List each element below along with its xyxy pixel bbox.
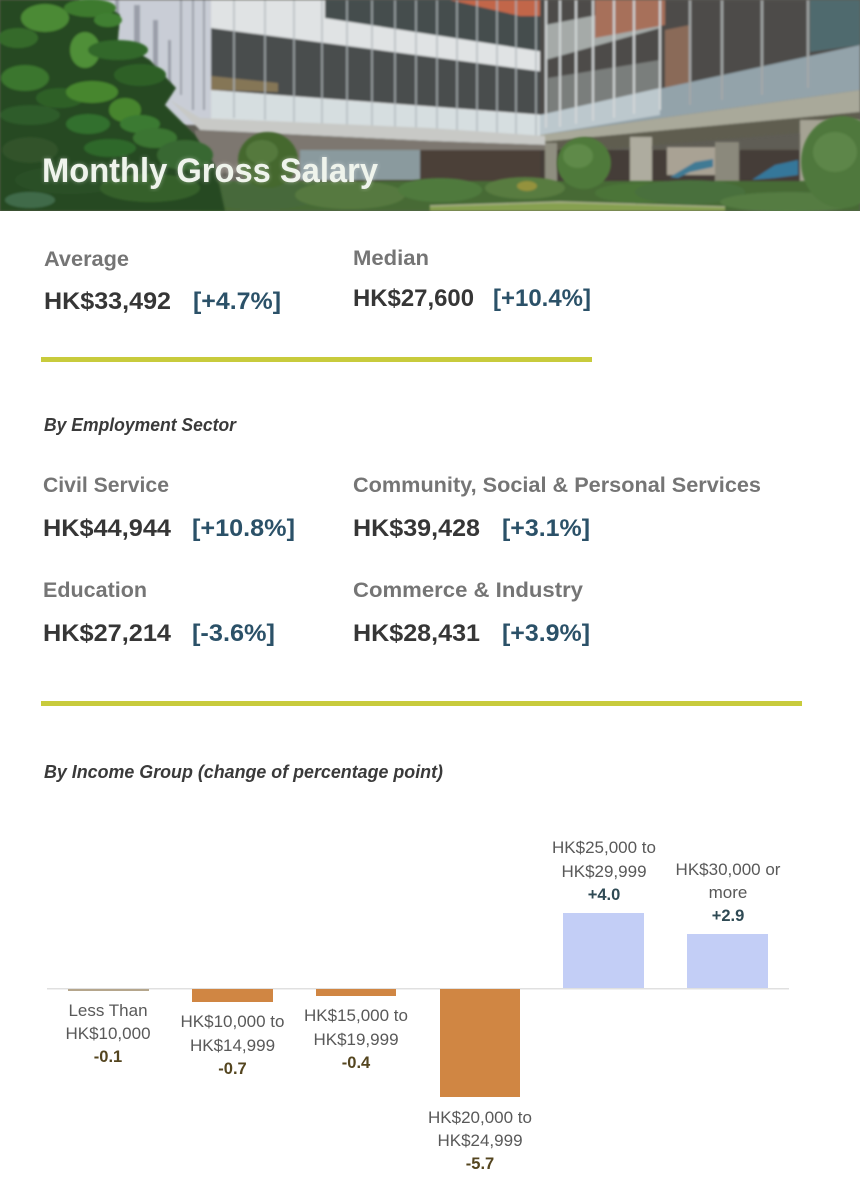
heading: by employment sector: By Employment Sector (44, 415, 237, 435)
stat: commerce and industry: Commerce & Industry (353, 579, 583, 602)
bar: less than HK$10,000: HK$10,000 (65, 1024, 151, 1043)
stat: education: [-3.6%] (192, 620, 275, 647)
bar: HK$30,000 or more: more (709, 883, 747, 902)
stat: community, social and personal services: [+3.1%] (502, 515, 590, 542)
stat: median salary: Median (353, 247, 429, 270)
stat: civil service (43, 474, 295, 542)
bar: HK$10,000 to HK$14,999: HK$14,999 (190, 1036, 275, 1055)
stat: commerce and industry: [+3.9%] (502, 620, 590, 647)
title: Monthly Gross Salary (42, 152, 378, 190)
bar: HK$15,000 to HK$19,999: -0.4 (342, 1054, 371, 1072)
bar: less than HK$10,000: Less Than (68, 1001, 148, 1020)
bar: HK$15,000 to HK$19,999: HK$19,999 (313, 1030, 399, 1049)
bar: HK$20,000 to HK$24,999: HK$24,999 (437, 1131, 523, 1150)
stat: average salary: [+4.7%] (193, 288, 281, 315)
stat: average salary (44, 248, 281, 315)
bar: HK$25,000 to HK$29,999: HK$25,000 to (552, 838, 656, 857)
title halo: Monthly Gross Salary (42, 152, 378, 190)
hero photo: courtyard building with trees (0, 0, 860, 212)
bar: HK$10,000 to HK$14,999: -0.7 (218, 1060, 247, 1078)
stat: education (43, 579, 275, 647)
bar: HK$20,000 to HK$24,999: HK$20,000 to (428, 1108, 532, 1127)
foliage: foreground tree (0, 0, 225, 211)
stat: average salary: HK$33,492 (44, 288, 171, 315)
heading: by income group: By Income Group (change of percentage point) (44, 762, 443, 782)
bar: HK$25,000 to HK$29,999: +4.0 (588, 886, 620, 904)
bar: HK$15,000 to HK$19,999 (304, 989, 408, 1072)
stat: median salary (353, 247, 591, 312)
stat: commerce and industry: HK$28,431 (353, 620, 480, 647)
bar: HK$20,000 to HK$24,999: -5.7 (466, 1155, 494, 1173)
bar: HK$10,000 to HK$14,999 (181, 989, 284, 1078)
bar: HK$10,000 to HK$14,999: HK$10,000 to (181, 1012, 284, 1031)
bar: HK$30,000 or more (676, 860, 781, 988)
foliage: hedges and shrubs (200, 116, 860, 212)
bar chart: income group change (47, 838, 789, 1173)
bar: HK$15,000 to HK$19,999: HK$15,000 to (304, 1006, 408, 1025)
stat: civil service: HK$44,944 (43, 515, 171, 542)
stat: community, social and personal services (353, 474, 761, 542)
stat: civil service: [+10.8%] (192, 515, 295, 542)
stat: commerce and industry (353, 579, 590, 647)
stat: education: Education (43, 579, 147, 602)
bar: less than HK$10,000 (65, 989, 151, 1066)
stat: civil service: Civil Service (43, 474, 169, 497)
bar: HK$20,000 to HK$24,999 (428, 989, 532, 1173)
bar: HK$25,000 to HK$29,999 (552, 838, 656, 988)
stat: education: HK$27,214 (43, 620, 171, 647)
bar: HK$30,000 or more: HK$30,000 or (676, 860, 781, 879)
bar: HK$30,000 or more: +2.9 (712, 907, 744, 925)
stat: community, social and personal services: HK$39,428 (353, 515, 480, 542)
stat: community, social and personal services: Community, Social & Personal Services (353, 474, 761, 497)
bar: HK$25,000 to HK$29,999: HK$29,999 (561, 862, 647, 881)
bar: less than HK$10,000: -0.1 (94, 1048, 122, 1066)
stat: median salary: HK$27,600 (353, 285, 474, 312)
stat: average salary: Average (44, 248, 129, 271)
stat: median salary: [+10.4%] (493, 285, 591, 312)
